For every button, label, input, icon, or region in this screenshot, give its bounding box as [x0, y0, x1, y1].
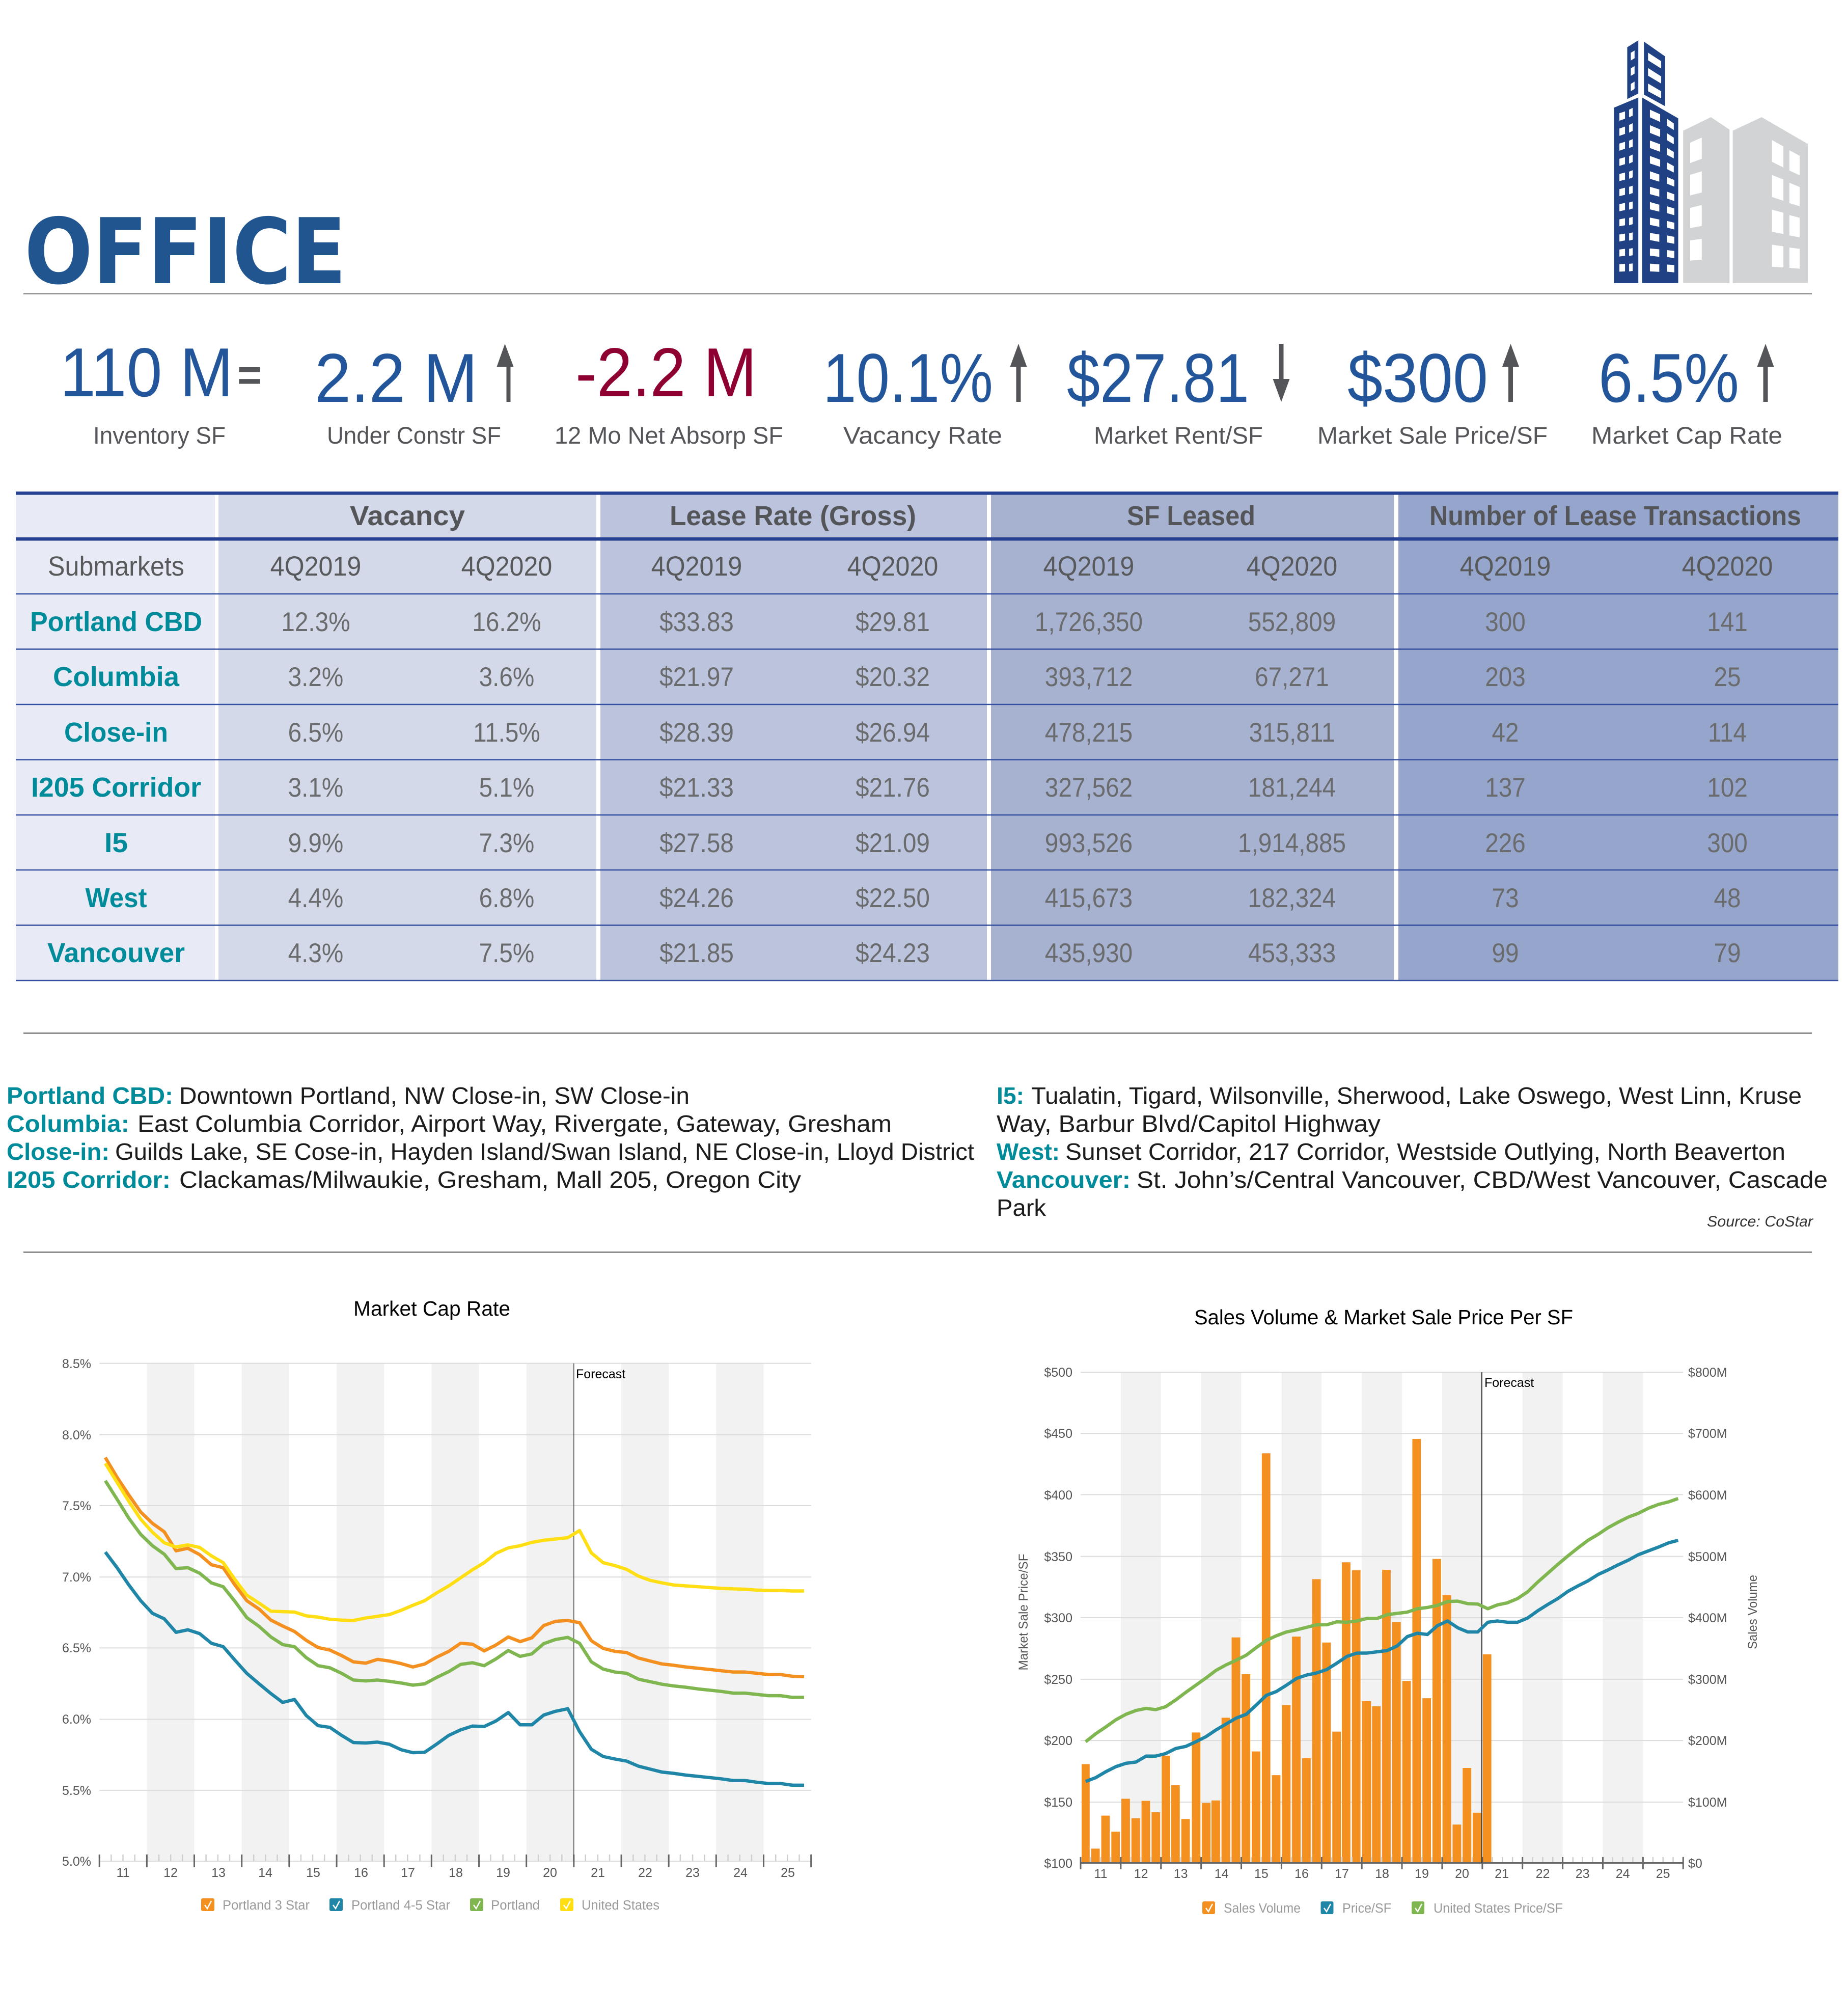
- row: Portland CBD: [30, 607, 1748, 637]
- text block: submarket definitions, left: Close-in:: [7, 1138, 109, 1165]
- plot area: [1081, 1372, 1683, 1869]
- left y axis labels: $400: [1044, 1488, 1072, 1503]
- KPI: under construction: Under Constr SF: [327, 422, 501, 449]
- row: I5: $21.09: [856, 828, 930, 858]
- KPI: market rent: Market Rent/SF: [1094, 422, 1263, 449]
- line: Price/SF: [1086, 1540, 1678, 1782]
- left y axis labels: $500: [1044, 1366, 1072, 1380]
- y axis labels: 8.0%: [62, 1428, 91, 1442]
- row: West: 48: [1714, 883, 1741, 913]
- icon: office buildings: [1614, 40, 1808, 283]
- KPI: net absorption: [555, 334, 783, 449]
- x axis labels: 21: [1495, 1867, 1509, 1881]
- row: Portland CBD: 300: [1485, 607, 1526, 637]
- title: OFFICE: OFFICE: [24, 199, 346, 305]
- y axis labels: 5.5%: [62, 1784, 91, 1798]
- row: Vancouver: $24.23: [856, 938, 930, 968]
- row: I5: 7.3%: [479, 828, 534, 858]
- row: West: 182,324: [1248, 883, 1336, 913]
- row: Close-in: $26.94: [856, 717, 930, 748]
- text block: submarket definitions, right: Park: [997, 1194, 1046, 1221]
- row: Columbia: Columbia: [53, 662, 180, 692]
- row: I5: 9.9%: [288, 828, 343, 858]
- right y axis labels: $800M: [1688, 1366, 1727, 1380]
- text block: submarket definitions, left: I205 Corridor:: [7, 1166, 171, 1193]
- row: Vancouver: 435,930: [1045, 938, 1133, 968]
- x axis labels: 23: [1576, 1867, 1590, 1881]
- x axis labels: 21: [591, 1866, 605, 1880]
- legend: United States: [582, 1898, 659, 1913]
- row: Portland CBD: 16.2%: [472, 607, 541, 637]
- source note: Source: CoStar: [1707, 1213, 1813, 1230]
- y axis labels: [62, 1357, 91, 1869]
- table header: periods: 4Q2020: [1682, 551, 1773, 582]
- left y axis labels: [1044, 1366, 1072, 1871]
- KPI: net absorption: 12 Mo Net Absorp SF: [555, 422, 783, 449]
- row: Vancouver: 4.3%: [288, 938, 343, 968]
- left y axis labels: $150: [1044, 1795, 1072, 1810]
- table header: periods: 4Q2020: [1247, 551, 1337, 582]
- KPI: market sale price: [1317, 339, 1548, 449]
- text block: submarket definitions, left: East Columbia Corridor, Airport Way, Rivergate, Gateway, Gresham: [137, 1110, 892, 1137]
- legend: [1202, 1901, 1563, 1916]
- x axis labels: 13: [211, 1866, 226, 1880]
- table header: groups: [350, 501, 1801, 531]
- y axis labels: 7.5%: [62, 1499, 91, 1513]
- right y axis labels: $0: [1688, 1857, 1702, 1871]
- row: Columbia: 3.6%: [479, 662, 534, 692]
- row: I205 Corridor: 5.1%: [479, 772, 534, 803]
- text block: submarket definitions, right: St. John’s/Central Vancouver, CBD/West Vancouver, Cascade: [1137, 1166, 1828, 1193]
- row: Columbia: 203: [1485, 662, 1526, 692]
- chart: Market Cap Rate: [62, 1297, 811, 1913]
- text block: submarket definitions, right: Way, Barbur Blvd/Capitol Highway: [997, 1110, 1381, 1137]
- row: I205 Corridor: 3.1%: [288, 772, 343, 803]
- row: West: 6.8%: [479, 883, 534, 913]
- table header: groups: Number of Lease Transactions: [1429, 501, 1801, 531]
- line: Portland 4-5 Star: [105, 1552, 804, 1785]
- x axis labels: 16: [354, 1866, 368, 1880]
- row: I205 Corridor: [31, 772, 1748, 803]
- row: I205 Corridor: 327,562: [1045, 772, 1133, 803]
- x axis labels: 16: [1294, 1867, 1309, 1881]
- row: Close-in: Close-in: [64, 717, 168, 748]
- x axis labels: 19: [496, 1866, 510, 1880]
- text block: submarket definitions, right: I5:: [997, 1082, 1024, 1109]
- row: West: 73: [1492, 883, 1519, 913]
- table header: groups: SF Leased: [1127, 501, 1255, 531]
- x axis labels: 22: [638, 1866, 652, 1880]
- left y axis labels: $200: [1044, 1734, 1072, 1748]
- table header: groups: Vacancy: [350, 501, 465, 531]
- right y axis labels: $100M: [1688, 1795, 1727, 1810]
- x axis labels: 13: [1174, 1867, 1188, 1881]
- table header: periods: 4Q2019: [651, 551, 742, 582]
- x axis labels: 22: [1536, 1867, 1550, 1881]
- row: Portland CBD: $29.81: [856, 607, 930, 637]
- x axis labels: [117, 1866, 795, 1880]
- row: Vancouver: Vancouver: [47, 938, 185, 968]
- row: Close-in: 6.5%: [288, 717, 343, 748]
- row: Columbia: 25: [1714, 662, 1741, 692]
- left y axis labels: $300: [1044, 1611, 1072, 1625]
- KPI: under construction: [315, 339, 513, 449]
- row: West: [86, 883, 1741, 913]
- line: Portland 3 Star: [105, 1457, 804, 1677]
- row: I205 Corridor: 102: [1707, 772, 1748, 803]
- y axis labels: 7.0%: [62, 1570, 91, 1585]
- legend: United States Price/SF: [1434, 1901, 1563, 1916]
- legend: Sales Volume: [1224, 1901, 1301, 1916]
- text block: submarket definitions, left: Portland CBD:: [7, 1082, 173, 1109]
- row: I205 Corridor: 137: [1485, 772, 1526, 803]
- legend: Portland: [491, 1898, 540, 1913]
- text block: submarket definitions, right: Tualatin, Tigard, Wilsonville, Sherwood, Lake Oswego, West Linn, Kruse: [1031, 1082, 1802, 1109]
- right y axis labels: $600M: [1688, 1488, 1727, 1503]
- row: Portland CBD: 141: [1707, 607, 1748, 637]
- KPI: inventory: =: [237, 351, 262, 400]
- text block: submarket definitions, left: Clackamas/Milwaukie, Gresham, Mall 205, Oregon City: [179, 1166, 801, 1193]
- y axis labels: 6.0%: [62, 1712, 91, 1727]
- KPI: market sale price: $300: [1347, 339, 1488, 417]
- chart: Sales Volume & Market Sale Price Per SF: [1016, 1305, 1760, 1916]
- row: I205 Corridor: $21.33: [659, 772, 734, 803]
- KPI: market cap rate: Market Cap Rate: [1591, 422, 1782, 449]
- row: Vancouver: 79: [1714, 938, 1741, 968]
- legend: Portland 4-5 Star: [351, 1898, 450, 1913]
- x axis labels: 20: [1455, 1867, 1469, 1881]
- row: I5: 300: [1707, 828, 1748, 858]
- x axis labels: 24: [1616, 1867, 1630, 1881]
- row: Columbia: [53, 662, 1741, 692]
- x axis labels: 15: [306, 1866, 320, 1880]
- table header: periods: 4Q2019: [270, 551, 361, 582]
- right y axis labels: [1688, 1366, 1727, 1871]
- table header: periods: 4Q2019: [1460, 551, 1551, 582]
- left y axis labels: $350: [1044, 1550, 1072, 1564]
- legend: Portland 3 Star: [223, 1898, 310, 1913]
- row: Vancouver: 7.5%: [479, 938, 534, 968]
- row: West: West: [86, 883, 147, 913]
- table header: groups: Lease Rate (Gross): [670, 501, 916, 531]
- text block: submarket definitions, left: Columbia:: [7, 1110, 129, 1137]
- row: I205 Corridor: $21.76: [856, 772, 930, 803]
- y axis labels: 6.5%: [62, 1641, 91, 1655]
- x axis labels: 18: [1375, 1867, 1389, 1881]
- row: Portland CBD: Portland CBD: [30, 607, 202, 637]
- x axis labels: 14: [258, 1866, 272, 1880]
- x axis labels: 12: [1134, 1867, 1148, 1881]
- x axis labels: 19: [1415, 1867, 1429, 1881]
- y axis title: volume: Sales Volume: [1746, 1575, 1760, 1649]
- row: I205 Corridor: 181,244: [1248, 772, 1336, 803]
- row: West: 415,673: [1045, 883, 1133, 913]
- KPI: market rent: $27.81: [1067, 339, 1249, 417]
- forecast label: Forecast: [1484, 1376, 1534, 1390]
- row: I5: [104, 828, 1748, 858]
- KPI: market cap rate: 6.5%: [1599, 339, 1739, 417]
- row: Vancouver: 99: [1492, 938, 1519, 968]
- KPI: vacancy rate: 10.1%: [823, 339, 993, 417]
- row: I205 Corridor: I205 Corridor: [31, 772, 201, 803]
- row: West: $22.50: [856, 883, 930, 913]
- legend: Price/SF: [1342, 1901, 1391, 1916]
- table header: periods: [48, 551, 1773, 582]
- KPI: inventory: Inventory SF: [93, 422, 226, 449]
- text block: submarket definitions, left: Downtown Portland, NW Close-in, SW Close-in: [179, 1082, 690, 1109]
- row: I5: 993,526: [1045, 828, 1133, 858]
- KPI row: [60, 334, 1782, 449]
- left y axis labels: $100: [1044, 1857, 1072, 1871]
- x axis labels: 17: [1335, 1867, 1349, 1881]
- row: Portland CBD: 12.3%: [281, 607, 350, 637]
- chart title: Market Cap Rate: [353, 1297, 510, 1320]
- x axis labels: 20: [543, 1866, 557, 1880]
- KPI: inventory: 110 M: [60, 334, 233, 411]
- x axis labels: 24: [733, 1866, 748, 1880]
- line: Portland: [105, 1481, 804, 1697]
- row: Close-in: 11.5%: [473, 717, 540, 748]
- row: Columbia: $21.97: [659, 662, 734, 692]
- text block: submarket definitions, right: [997, 1082, 1828, 1221]
- row: Vancouver: $21.85: [659, 938, 734, 968]
- text block: submarket definitions, left: [7, 1082, 974, 1193]
- right y axis labels: $500M: [1688, 1550, 1727, 1564]
- row: West: 4.4%: [288, 883, 343, 913]
- row: Close-in: 114: [1708, 717, 1747, 748]
- row: I5: I5: [104, 828, 128, 858]
- right y axis labels: $400M: [1688, 1611, 1727, 1625]
- table: submarkets: [16, 492, 1838, 980]
- line: United States: [105, 1463, 804, 1621]
- line: United States Price/SF: [1086, 1499, 1678, 1742]
- text block: submarket definitions, right: Sunset Corridor, 217 Corridor, Westside Outlying, North Beaverton: [1065, 1138, 1785, 1165]
- row: I5: 226: [1485, 828, 1526, 858]
- x axis labels: 12: [163, 1866, 178, 1880]
- x axis labels: [1094, 1867, 1670, 1881]
- left y axis labels: $450: [1044, 1427, 1072, 1441]
- KPI: vacancy rate: [823, 339, 1027, 449]
- KPI: market sale price: Market Sale Price/SF: [1317, 422, 1548, 449]
- row: Close-in: 478,215: [1045, 717, 1133, 748]
- text block: submarket definitions, right: Vancouver:: [997, 1166, 1131, 1193]
- y axis title: price: Market Sale Price/SF: [1016, 1554, 1031, 1671]
- text block: submarket definitions, right: West:: [997, 1138, 1060, 1165]
- x axis labels: 14: [1215, 1867, 1229, 1881]
- table header: periods: 4Q2019: [1043, 551, 1134, 582]
- left y axis labels: $250: [1044, 1673, 1072, 1687]
- row: Columbia: 393,712: [1045, 662, 1133, 692]
- row: Portland CBD: 1,726,350: [1035, 607, 1143, 637]
- row: Vancouver: [47, 938, 1741, 968]
- KPI: market cap rate: [1591, 339, 1782, 449]
- row: Close-in: 315,811: [1249, 717, 1335, 748]
- bars: sales volume: [1082, 1439, 1492, 1863]
- y axis labels: 8.5%: [62, 1357, 91, 1371]
- y axis labels: 5.0%: [62, 1855, 91, 1869]
- x axis labels: 25: [1656, 1867, 1670, 1881]
- row: I5: 1,914,885: [1238, 828, 1346, 858]
- text block: submarket definitions, left: Guilds Lake, SE Cose-in, Hayden Island/Swan Island, NE Close-in, Lloyd District: [115, 1138, 974, 1165]
- right y axis labels: $700M: [1688, 1427, 1727, 1441]
- row: West: $24.26: [659, 883, 734, 913]
- x axis labels: 23: [685, 1866, 700, 1880]
- row: Portland CBD: 552,809: [1248, 607, 1336, 637]
- x axis labels: 11: [1094, 1867, 1107, 1881]
- right y axis labels: $200M: [1688, 1734, 1727, 1748]
- table header: periods: 4Q2020: [461, 551, 552, 582]
- KPI: inventory: [60, 334, 262, 449]
- KPI: net absorption: -2.2 M: [575, 334, 757, 411]
- row: Columbia: $20.32: [856, 662, 930, 692]
- x axis labels: 25: [781, 1866, 795, 1880]
- table header: periods: Submarkets: [48, 551, 184, 582]
- row: Close-in: $28.39: [659, 717, 734, 748]
- row: Portland CBD: $33.83: [659, 607, 734, 637]
- right y axis labels: $300M: [1688, 1673, 1727, 1687]
- x axis labels: 17: [401, 1866, 415, 1880]
- legend: [201, 1898, 659, 1913]
- plot area: [99, 1364, 811, 1867]
- x axis labels: 15: [1254, 1867, 1269, 1881]
- row: Close-in: 42: [1492, 717, 1519, 748]
- KPI: market rent: [1067, 339, 1289, 449]
- row: Columbia: 3.2%: [288, 662, 343, 692]
- row: Columbia: 67,271: [1255, 662, 1329, 692]
- KPI: under construction: 2.2 M: [315, 339, 478, 417]
- x axis labels: 11: [117, 1866, 129, 1880]
- x axis labels: 18: [449, 1866, 463, 1880]
- row: Vancouver: 453,333: [1248, 938, 1336, 968]
- chart title: Sales Volume & Market Sale Price Per SF: [1194, 1305, 1573, 1329]
- KPI: vacancy rate: Vacancy Rate: [843, 422, 1002, 449]
- row: Close-in: [64, 717, 1747, 748]
- row: I5: $27.58: [659, 828, 734, 858]
- forecast label: Forecast: [576, 1367, 625, 1381]
- table header: periods: 4Q2020: [847, 551, 938, 582]
